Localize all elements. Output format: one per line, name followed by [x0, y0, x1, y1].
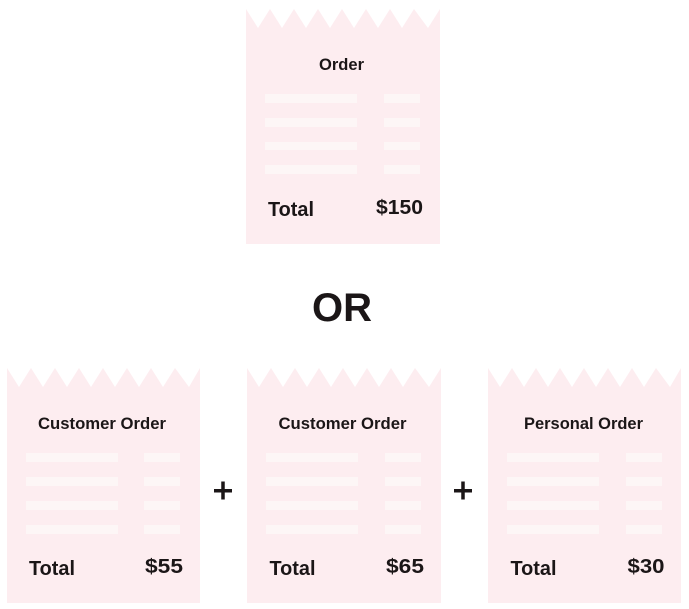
heading: personal order: Personal Order — [524, 415, 644, 433]
total amount: $65 — [386, 555, 424, 578]
receipt: customer order 1 — [7, 368, 200, 603]
line items — [265, 94, 420, 174]
total label: Total — [29, 557, 75, 580]
receipt: order — [246, 9, 440, 244]
receipt paper — [7, 368, 200, 603]
total amount: $150 — [376, 196, 423, 219]
heading: or: OR — [312, 286, 372, 330]
plus sign 1 — [214, 482, 232, 500]
total amount: $30 — [628, 555, 664, 578]
line items — [266, 453, 421, 534]
heading: customer order: Customer Order — [278, 415, 407, 433]
total label: Total — [268, 198, 314, 221]
receipt: personal order — [488, 368, 681, 603]
total label: Total — [510, 557, 556, 580]
heading: customer order: Customer Order — [38, 415, 167, 433]
total label: Total — [270, 557, 316, 580]
receipt paper — [247, 368, 441, 603]
plus sign 2 — [454, 482, 472, 500]
receipt paper — [246, 9, 440, 244]
line items — [26, 453, 180, 534]
receipt paper — [488, 368, 681, 603]
total amount: $55 — [145, 555, 183, 578]
line items — [507, 453, 662, 534]
heading: order: Order — [319, 56, 365, 74]
receipt: customer order 2 — [247, 368, 441, 603]
